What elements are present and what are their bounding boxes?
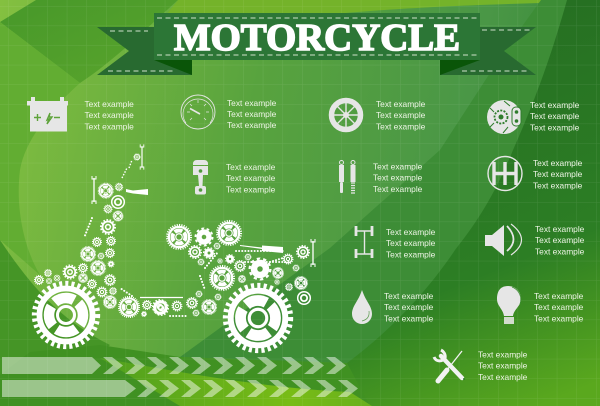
text: wheel: Text example bbox=[376, 122, 426, 132]
text: shock absorbers: Text example bbox=[373, 172, 423, 182]
frame rail and connecting dots bbox=[140, 296, 183, 298]
icon: light bulb bbox=[497, 286, 521, 324]
text: light bulb: Text example bbox=[534, 291, 584, 301]
front body gears bbox=[34, 154, 168, 317]
rear body gears bbox=[153, 221, 310, 316]
handlebar grip bbox=[126, 189, 148, 195]
text: light bulb: Text example bbox=[534, 314, 584, 324]
text: battery: Text example bbox=[84, 110, 134, 120]
ribbon left tail bbox=[97, 27, 192, 75]
motorcycle made of gears bbox=[34, 144, 315, 350]
text: chassis: Text example bbox=[386, 238, 436, 248]
text: oil drop: Text example bbox=[384, 291, 434, 301]
text: gauge: Text example bbox=[227, 98, 277, 108]
arrow row 1 bbox=[2, 357, 346, 374]
text: brake disc: Text example bbox=[530, 122, 580, 132]
text: speaker: Text example bbox=[535, 224, 585, 234]
text: gear shifter: Text example bbox=[533, 169, 583, 179]
text: brake disc: Text example bbox=[530, 111, 580, 121]
rear wheel bbox=[226, 286, 290, 350]
text: shock absorbers: Text example bbox=[373, 162, 423, 172]
ribbon right tail bbox=[440, 27, 536, 75]
icon: brake disc bbox=[487, 100, 521, 134]
text: chassis: Text example bbox=[386, 227, 436, 237]
front wheel bbox=[35, 284, 97, 346]
text: piston: Text example bbox=[226, 162, 276, 172]
text: wheel: Text example bbox=[376, 99, 426, 109]
text: battery: Text example bbox=[84, 99, 134, 109]
text: shock absorbers: Text example bbox=[373, 184, 423, 194]
arrow row 2 bbox=[2, 380, 358, 397]
text: chassis: Text example bbox=[386, 250, 436, 260]
text: light bulb: Text example bbox=[534, 302, 584, 312]
text: gauge: Text example bbox=[227, 109, 277, 119]
icon: wheel bbox=[332, 100, 360, 130]
icon: oil drop bbox=[352, 290, 372, 324]
icon: tools bbox=[434, 350, 465, 381]
title ribbon bbox=[97, 13, 536, 75]
text: gauge: Text example bbox=[227, 120, 277, 130]
text: gear shifter: Text example bbox=[533, 180, 583, 190]
text: oil drop: Text example bbox=[384, 302, 434, 312]
rear screwdriver bbox=[240, 245, 283, 253]
icon: gauge bbox=[181, 95, 215, 129]
text: battery: Text example bbox=[84, 122, 134, 132]
text: speaker: Text example bbox=[535, 235, 585, 245]
icon: chassis bbox=[356, 226, 372, 258]
text: wheel: Text example bbox=[376, 110, 426, 120]
title: MOTORCYCLE bbox=[174, 17, 460, 59]
icon: gear shifter bbox=[488, 156, 522, 190]
wrenches bbox=[92, 176, 96, 204]
text: gear shifter: Text example bbox=[533, 158, 583, 168]
text: tools: Text example bbox=[478, 360, 528, 370]
text: tools: Text example bbox=[478, 372, 528, 382]
icon: piston bbox=[193, 160, 208, 194]
icon: shock absorbers bbox=[339, 160, 356, 193]
icon: speaker bbox=[485, 224, 522, 256]
text: piston: Text example bbox=[226, 184, 276, 194]
text: oil drop: Text example bbox=[384, 314, 434, 324]
ribbon band bbox=[154, 13, 480, 60]
icon: battery bbox=[27, 97, 68, 132]
text: brake disc: Text example bbox=[530, 100, 580, 110]
text: speaker: Text example bbox=[535, 246, 585, 256]
text: piston: Text example bbox=[226, 173, 276, 183]
text: tools: Text example bbox=[478, 350, 528, 360]
